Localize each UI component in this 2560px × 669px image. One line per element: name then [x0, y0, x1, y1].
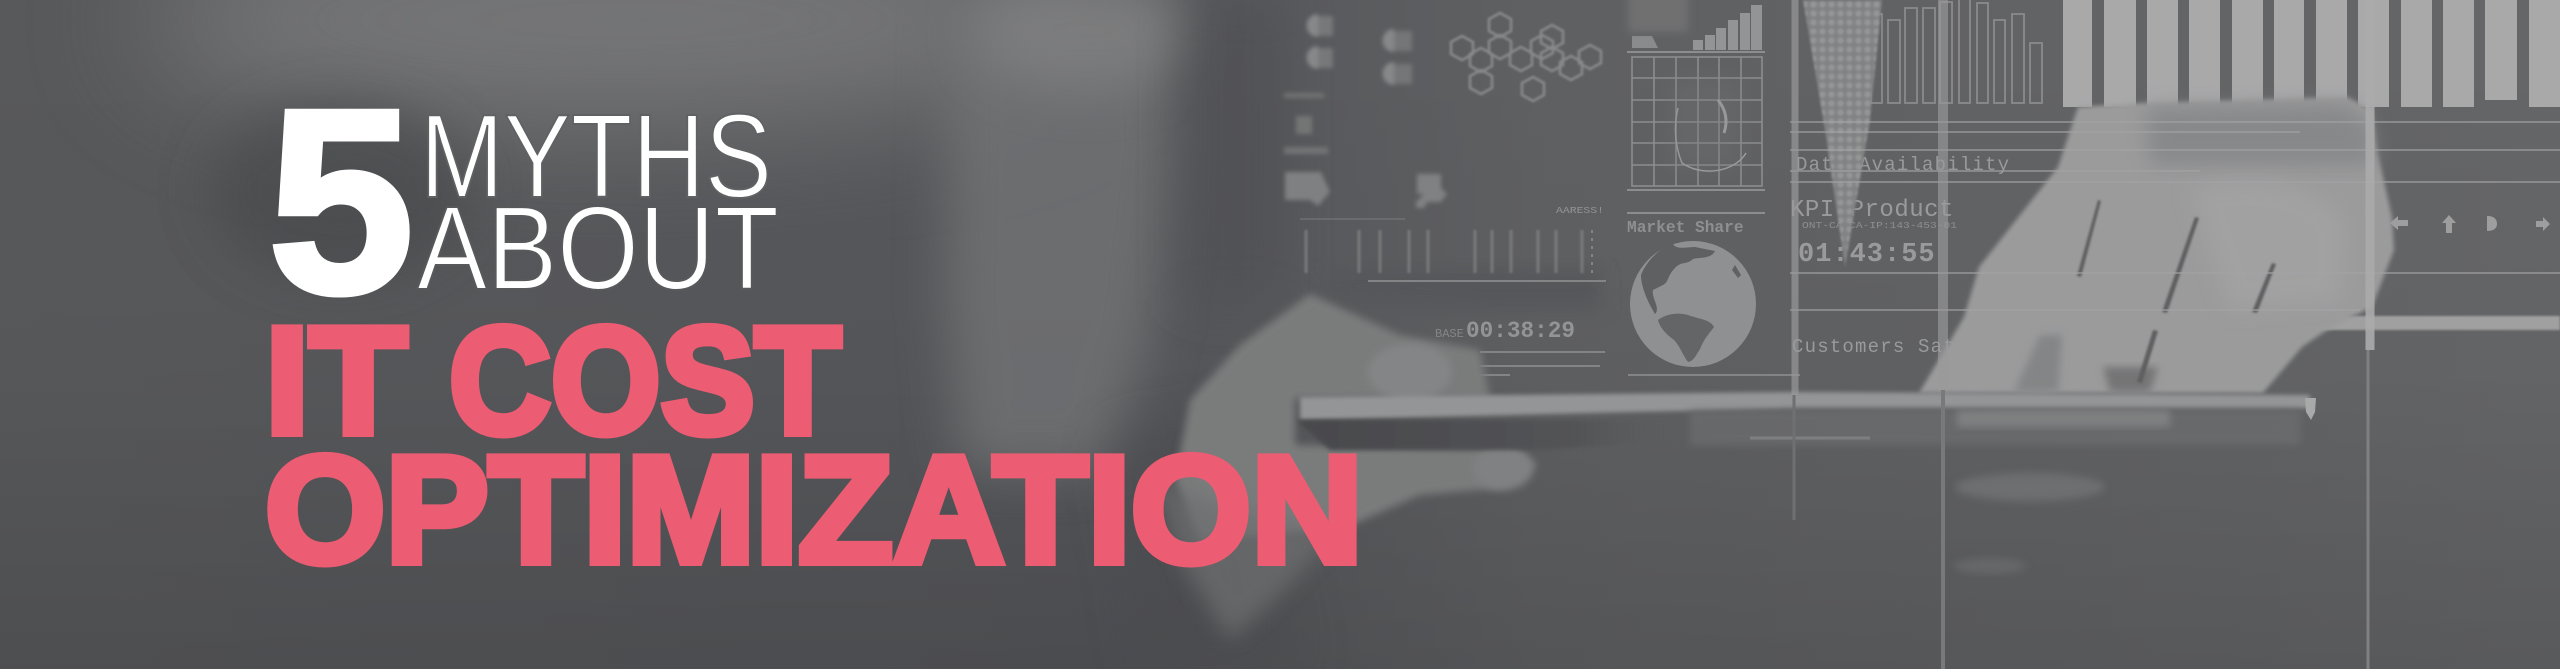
it cost: COST [449, 296, 841, 466]
label: timer: 00:38:29 [1466, 318, 1575, 344]
dashboard: barcode strip and rules [1300, 219, 1800, 375]
vertical light beams [1794, 0, 2370, 669]
horizontal light band at right [2100, 316, 2560, 330]
dashboard data readouts [1790, 154, 2069, 358]
nav arrows [2390, 215, 2550, 233]
right hand on tablet [1919, 97, 2394, 393]
about: ABOUT [417, 182, 779, 315]
globe [1630, 241, 1756, 367]
dashboard data readouts: Data Availability [1796, 154, 2010, 176]
it cost [265, 296, 841, 466]
label: timer: AARESS! [1556, 206, 1604, 216]
dashboard data readouts: Customers Satisfaction [1792, 336, 2069, 358]
dashboard: radar grid [1627, 52, 1765, 213]
honeycomb cone [1803, 0, 1882, 267]
optimization: OPTIMIZATION [265, 425, 1363, 595]
tablet [1296, 392, 2316, 574]
outline bar chart [1871, 0, 2042, 103]
businessman silhouette, blurred [945, 0, 1600, 669]
dashboard rules [1790, 122, 2560, 310]
numeral 5: 5 [268, 55, 414, 348]
big top bars [2063, 0, 2560, 107]
label: timer: BASE [1435, 327, 1464, 341]
it cost: IT [265, 296, 407, 466]
myths: MYTHS [420, 90, 772, 223]
dashboard: hexagon network [1451, 13, 1601, 101]
dashboard data readouts: KPI Product [1790, 197, 1954, 224]
dashboard: small icons column [1284, 14, 1447, 208]
title: 5 myths about it cost optimization [265, 55, 1363, 595]
label: timer [1435, 206, 1604, 344]
dashboard: small bar chart [1628, 0, 1762, 50]
dashboard data readouts: 01:43:55 [1798, 240, 1936, 270]
label: market share: Market Share [1627, 219, 1744, 237]
left hand holding tablet [1150, 294, 1537, 640]
dashboard data readouts: ONT-CALCA-IP:143-453-01 [1802, 221, 1957, 231]
